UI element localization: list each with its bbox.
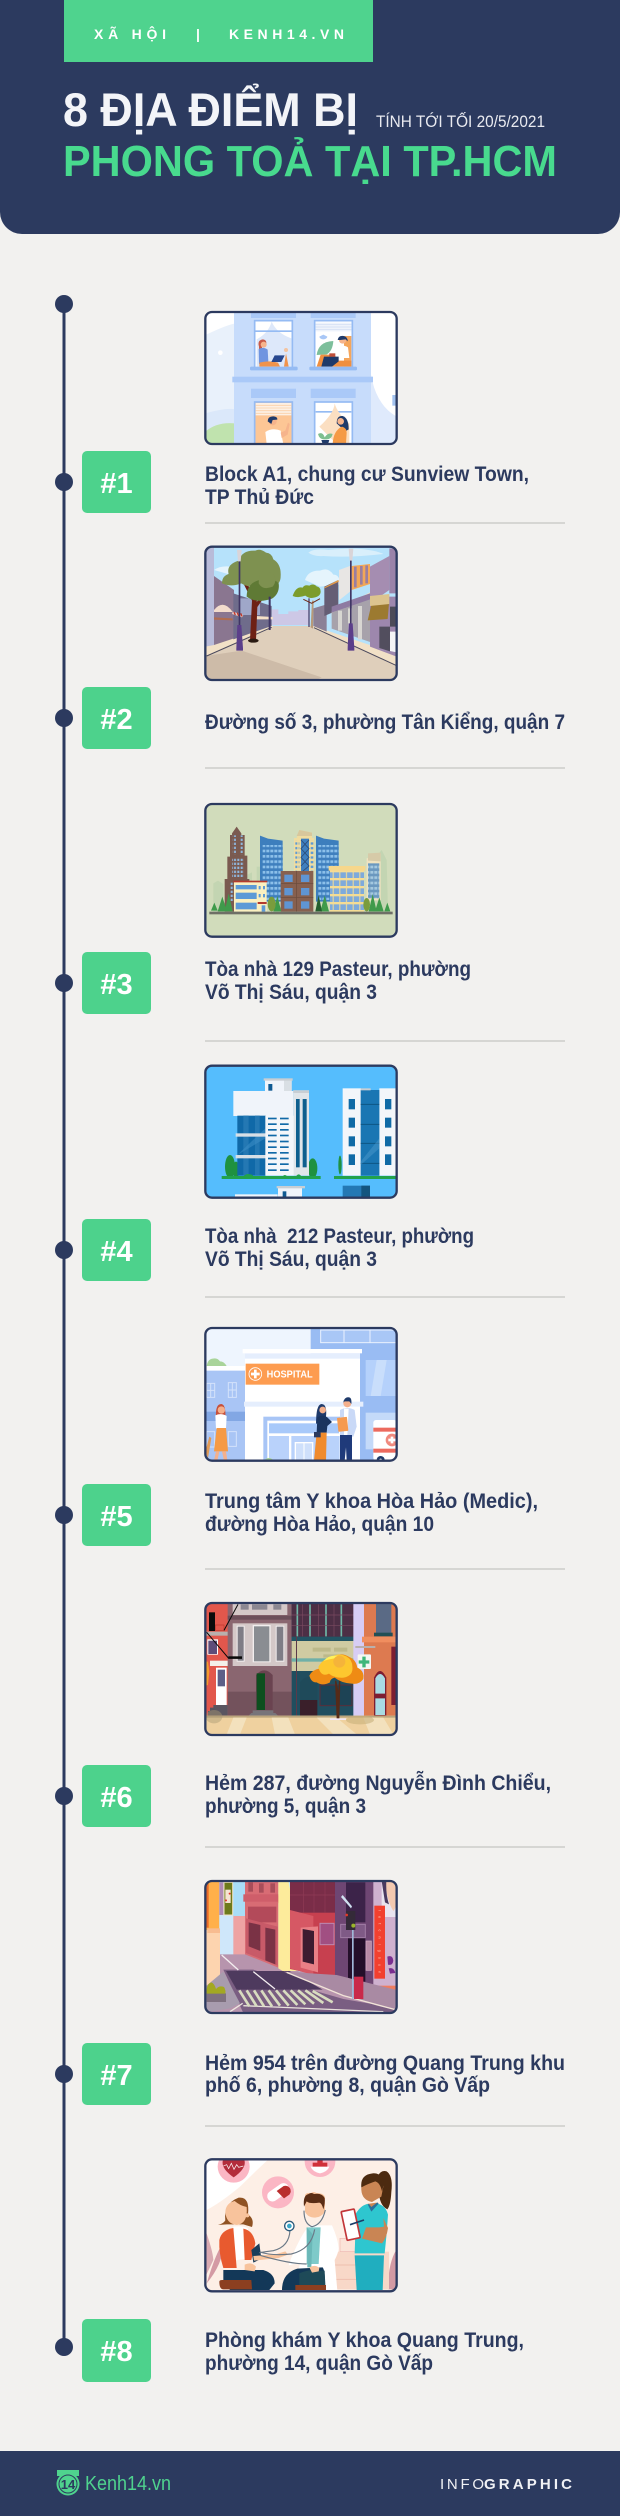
address #7: phố 6, phường 8, quận Gò Vấp <box>205 2074 490 2097</box>
address #3 <box>205 958 471 1004</box>
number badge #5: #5 <box>100 1501 133 1533</box>
logo icon: 14 <box>61 2477 76 2492</box>
location 5 <box>82 1328 538 1546</box>
hospital sign: HOSPITAL <box>267 1370 313 1381</box>
number badge #6 <box>82 1765 151 1827</box>
illustration: medical checkup <box>205 2146 397 2291</box>
timeline <box>55 295 73 2356</box>
number badge #7 <box>82 2043 151 2105</box>
address #6: phường 5, quận 3 <box>205 1795 366 1818</box>
hospital building <box>243 1349 363 1461</box>
couple <box>314 1397 357 1461</box>
window 3 <box>255 402 292 445</box>
yellow building <box>329 866 365 912</box>
yellow tree <box>309 1654 364 1720</box>
cream building <box>233 881 267 912</box>
illustration: apartment block <box>205 312 397 445</box>
number badge #1: #1 <box>100 468 133 500</box>
address #8: Phòng khám Y khoa Quang Trung, <box>205 2329 524 2352</box>
dividers <box>205 522 565 2127</box>
illustration: street <box>205 547 397 680</box>
pharmacy sign <box>355 1646 375 1669</box>
address #5: Trung tâm Y khoa Hòa Hảo (Medic), <box>205 1490 538 1513</box>
address #4 <box>205 1225 474 1271</box>
cross badge <box>305 2146 335 2177</box>
far right tower <box>367 853 381 900</box>
header panel <box>0 0 620 234</box>
traffic light <box>341 1895 363 1999</box>
number badge #2 <box>82 687 151 749</box>
pill badge <box>262 2176 294 2208</box>
billboard <box>372 1881 397 1991</box>
address #3: Võ Thị Sáu, quận 3 <box>205 981 377 1004</box>
address #8: phường 14, quận Gò Vấp <box>205 2352 433 2375</box>
pavement <box>205 1710 397 1735</box>
brick building <box>281 871 313 912</box>
road <box>205 1954 397 2013</box>
doctor <box>282 2192 339 2291</box>
address #4: Tòa nhà 212 Pasteur, phường <box>205 1225 474 1248</box>
address #2: Đường số 3, phường Tân Kiểng, quận 7 <box>205 711 565 734</box>
red corner building <box>290 1881 337 1975</box>
purple shop <box>335 1881 374 1989</box>
location 2 <box>82 547 565 749</box>
teal shop <box>292 1603 354 1716</box>
address #5: đường Hòa Hảo, quận 10 <box>205 1513 434 1536</box>
pavement right <box>283 1972 397 2010</box>
logo icon <box>56 2470 80 2496</box>
right buildings <box>313 604 327 632</box>
orange house <box>362 1603 397 1716</box>
lamp posts <box>236 549 354 651</box>
number badge #4 <box>82 1219 151 1281</box>
category tab: XÃ HỘI <box>94 25 166 42</box>
location 4 <box>82 1066 474 1281</box>
right building <box>334 1088 397 1179</box>
number badge #8 <box>82 2319 151 2382</box>
address #1: TP Thủ Đức <box>205 486 314 509</box>
ground and trees <box>209 912 393 914</box>
big tree <box>244 584 262 640</box>
logo wordmark: Kenh14.vn <box>85 2473 171 2495</box>
left kerb and bush <box>205 1928 240 2012</box>
nurse <box>341 2171 392 2290</box>
left buildings <box>206 548 214 646</box>
address #5 <box>205 1490 538 1536</box>
address #4: Võ Thị Sáu, quận 3 <box>205 1248 377 1271</box>
yellow facade <box>278 1881 297 1971</box>
red house <box>206 1604 228 1716</box>
infographic label <box>440 2476 572 2493</box>
number badge #1 <box>82 451 151 513</box>
category tab: | <box>196 26 200 42</box>
illustration: city towers <box>205 804 397 937</box>
billboard: lotcnigsun <box>377 1910 381 1973</box>
pink buildings <box>243 1881 281 1968</box>
blue towers <box>260 836 339 902</box>
ambulance <box>373 1420 396 1460</box>
number badge #5 <box>82 1484 151 1546</box>
heart badge <box>218 2151 250 2183</box>
photo frame <box>205 312 397 444</box>
address #6: Hẻm 287, đường Nguyễn Đình Chiểu, <box>205 1771 551 1795</box>
tan centre tower <box>294 830 314 873</box>
zebra crossing <box>239 1990 333 2006</box>
hospital sign <box>246 1364 319 1385</box>
leaves <box>205 2230 213 2277</box>
address #1: Block A1, chung cư Sunview Town, <box>205 463 529 486</box>
far tree <box>311 601 314 629</box>
location 1 <box>82 312 529 513</box>
illustration: office buildings <box>205 1066 397 1198</box>
number badge #7: #7 <box>100 2060 133 2092</box>
illustration: street crossing <box>205 1881 397 2013</box>
title line 2: PHONG TOẢ TẠI TP.HCM <box>63 136 557 186</box>
title line 1: 8 ĐỊA ĐIỂM BỊ <box>63 83 358 136</box>
window 2 <box>315 321 352 368</box>
brown tower <box>225 827 249 912</box>
location 8 <box>82 2146 524 2382</box>
number badge #3: #3 <box>100 969 133 1001</box>
category tab <box>64 0 373 62</box>
cabinet <box>334 2238 389 2289</box>
address #7: Hẻm 954 trên đường Quang Trung khu <box>205 2052 565 2075</box>
address #7 <box>205 2052 565 2097</box>
date note: TÍNH TỚI TỐI 20/5/2021 <box>376 111 545 131</box>
infographic label: GRAPHIC <box>484 2476 572 2493</box>
address #6 <box>205 1771 551 1818</box>
stethoscope dial <box>285 2221 294 2231</box>
patient <box>218 2198 288 2290</box>
left building <box>222 1078 321 1179</box>
illustration: alley shopfronts <box>205 1603 397 1735</box>
lilac strip <box>353 1603 365 1716</box>
woman left <box>205 1404 228 1461</box>
number badge #8: #8 <box>100 2336 133 2368</box>
location 6 <box>82 1603 551 1827</box>
number badge #4: #4 <box>100 1236 133 1268</box>
window 1 <box>255 321 292 368</box>
window 4 <box>315 402 352 445</box>
location 7 <box>82 1881 565 2105</box>
category tab: KENH14.VN <box>229 26 344 42</box>
location 3 <box>82 804 471 1014</box>
brown townhouse <box>207 1603 292 1716</box>
footer <box>0 2451 620 2516</box>
address #3: Tòa nhà 129 Pasteur, phường <box>205 958 471 981</box>
number badge #6: #6 <box>100 1782 133 1814</box>
address #8 <box>205 2329 524 2375</box>
stethoscope <box>259 2210 325 2264</box>
address #1 <box>205 463 529 509</box>
road <box>205 626 397 680</box>
illustration: hospital <box>205 1328 398 1464</box>
lower building tops <box>235 1186 370 1198</box>
number badge #3 <box>82 952 151 1014</box>
infographic label: INFO <box>440 2476 484 2493</box>
number badge #2: #2 <box>100 704 133 736</box>
